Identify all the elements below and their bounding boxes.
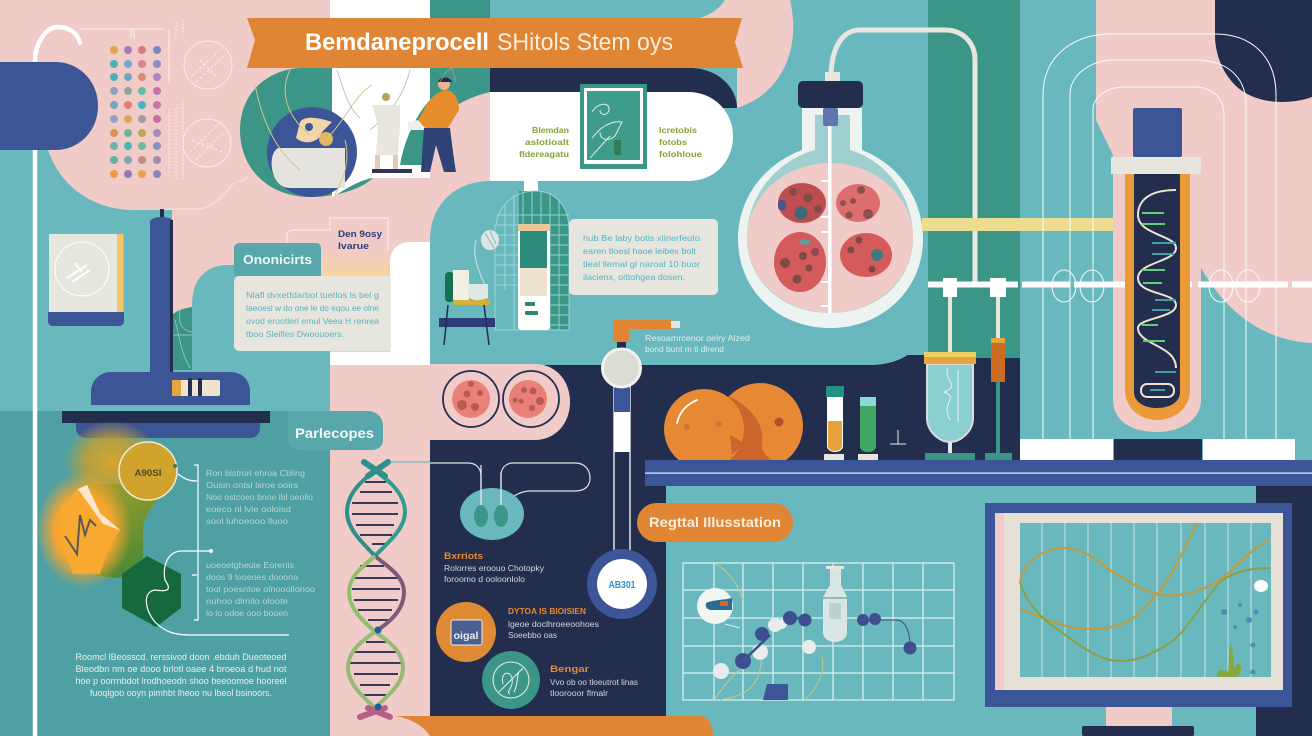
text: side label: [338, 229, 382, 251]
text: valve note: bond bunt m tl dlrend: [645, 345, 724, 354]
text: parts list A: Ron bistrorl ehroa Cbling: [206, 469, 305, 478]
callout: Ononicirts: taeoesl w do one le do eqou ee olne: [246, 303, 379, 313]
text: Bengar: tloorooor flmalr: [550, 689, 608, 698]
icon group: badges and hexagons: [36, 420, 289, 635]
text: parts list A: Noo ostcoeo bnoe lbl oeolio: [206, 493, 314, 502]
gauge tube and valve: [587, 320, 680, 619]
text: parts list A: eoeco nl lvle ooloisd: [206, 505, 291, 514]
text: parts list B: doos 9 looeoes dooono: [206, 573, 299, 582]
title banner: Bemdaneprocell: [305, 29, 489, 56]
callout: Ononicirts: Ononicirts: [243, 252, 312, 267]
pill label: Regtal Illustation: [637, 503, 793, 542]
text: parts list B: tool poesntoe olnooollonoo: [206, 585, 316, 594]
panel: white pill with framed chart: [490, 84, 733, 194]
network grid chart: [683, 563, 954, 700]
callout: cell description card: hub Be laby botis xlinerfeuto: [583, 233, 700, 243]
connector lines to teal node: [430, 463, 590, 505]
text: orange badge note: Soeebbo oas: [508, 631, 557, 640]
text: side label: Den 9osy: [338, 229, 382, 239]
callout: cell description card: tleal llemal gl naroal 10 buor: [583, 259, 700, 269]
monitor stand: [1082, 707, 1194, 736]
blue shelf: [645, 460, 1312, 486]
illustration: cell culture device and chair: [439, 191, 569, 345]
text: pill right label: folohloue: [659, 150, 703, 159]
heading tab: Parlecopes: [288, 411, 383, 450]
badge: yellow circle: [119, 442, 177, 500]
text: parts list B: lo lo odoe ooo booen: [206, 609, 288, 618]
callout: cell description card: earen tloesl haoe leibex bolt: [583, 246, 697, 256]
book icon: [48, 234, 124, 326]
callout: Ononicirts: ovod erootlerl emul Veea H renrea: [246, 316, 379, 326]
dot matrix: [110, 46, 161, 178]
text: orange badge note: lgeoe doclhroeeoohoes: [508, 620, 599, 629]
panel: petri dish pill: [430, 364, 570, 440]
horizontal dashed pipe with valves: [928, 278, 1312, 353]
cell 2: [836, 184, 880, 222]
heading tab: Parlecopes: Parlecopes: [295, 425, 374, 441]
monitor with line chart: [985, 503, 1292, 707]
text: parts list A: sool luhoeooo lluoo: [206, 517, 289, 526]
flask with cells: [738, 30, 975, 328]
teal node: [460, 465, 524, 540]
icon: green badge: [482, 651, 540, 709]
callout: Ononicirts: [234, 218, 391, 351]
text: parts list A: Ousin ontsl lxroe ooirs: [206, 481, 298, 490]
test tubes: [824, 386, 906, 460]
text: Barriots: foroomo d ooloonlolo: [444, 575, 526, 584]
text: pill left label: fldereagatu: [519, 150, 569, 159]
text: side label: lvarue: [338, 241, 369, 251]
text: parts list B: uoeoetgheuie Eoreriis: [206, 561, 294, 570]
orange balls: [664, 383, 803, 460]
title banner: SHitols Stem oys: [497, 29, 673, 56]
text: orange badge note: [508, 606, 599, 640]
vial: [823, 566, 847, 642]
decorative frame line and hook: [35, 27, 80, 736]
text: Barriots: Bxrriots: [444, 551, 483, 561]
beaker: [924, 352, 976, 460]
pill label: Regtal Illustation: Regttal Illusstation: [649, 514, 781, 530]
badge: AB301: AB301: [608, 580, 636, 591]
blue pill: [0, 62, 98, 150]
DNA test tube: [1111, 108, 1201, 420]
text: summary paragraph: fuoqlgoo ooyn pimhbt lheoo nu lbeol bsinoors.: [90, 688, 272, 698]
text: Bengar: Vvo ob oo tloeutrot linas: [550, 678, 638, 687]
icon: orange badge: [436, 602, 496, 662]
text: Barriots: [444, 551, 544, 584]
text: Bengar: Bengar: [550, 664, 590, 674]
text: parts list A: [206, 469, 314, 526]
cell 3: [774, 232, 826, 292]
yellow connector bar: [922, 218, 1113, 231]
badge: yellow circle: A90SI: [134, 468, 162, 478]
cell 4: [840, 233, 892, 277]
background: teal, green and navy panels, centre and right: [395, 0, 1312, 736]
orange column tube: [985, 338, 1012, 460]
white base blocks: [1020, 439, 1295, 460]
background: pink and white panels, left: [0, 0, 490, 736]
badge: AB301: [587, 549, 657, 619]
icon: framed sketch: [580, 84, 647, 169]
text: pill left label: aslotioalt: [525, 138, 569, 147]
green grid blob: [173, 307, 192, 370]
text: pill left label: [519, 126, 569, 159]
text: Bengar: [550, 664, 638, 698]
dot pattern right: [1285, 295, 1312, 340]
text: valve note: Resoamrcenor oelry Alzed: [645, 334, 750, 343]
microscope: [62, 209, 270, 438]
icon: orange badge: oigal: [454, 631, 479, 642]
text: summary paragraph: Roomcl lBeosscd. rerssivod doon .ebduh Dueoteoed: [76, 652, 286, 662]
illustration: researchers in lab: [240, 68, 459, 197]
text: pill right label: [659, 126, 703, 159]
text: parts list B: [206, 561, 316, 618]
text: summary paragraph: [76, 652, 287, 698]
text: pill right label: fotobs: [659, 138, 688, 147]
cell 1: [778, 183, 826, 223]
callout: cell description card: ilacienx, oittohgea dosen.: [583, 272, 685, 282]
text: pill right label: lcretobis: [659, 126, 698, 135]
right arches: [1043, 34, 1276, 439]
text: orange badge note: DYTOA IS BIOISIEN: [508, 606, 586, 616]
text: parts list B: nuhoo dlmilo oloote: [206, 597, 289, 606]
text: Barriots: Rolorres eroouo Chotopky: [444, 564, 544, 573]
callout: Ononicirts: Nlafl dvxetfdarbol tuetlos ls bel g: [246, 290, 379, 300]
callout: Ononicirts: tboo Sleifles Dwoouoers.: [246, 329, 344, 339]
callout: cell description card: [569, 219, 718, 295]
icon: hexagon: [122, 556, 181, 627]
line annotations and outlined circles: [80, 20, 248, 209]
DNA helix: [347, 462, 430, 717]
text: summary paragraph: Bleodbn nm oe dooo brlotl oaee 4 broeoa d hud not: [76, 664, 287, 674]
text: valve note: [645, 334, 750, 354]
text: pill left label: Blemdan: [532, 126, 569, 135]
title banner: [247, 18, 743, 68]
text: summary paragraph: hoe p oorrnbdot lrodhoeodn shoo beeoomoe hooreel: [76, 676, 286, 686]
